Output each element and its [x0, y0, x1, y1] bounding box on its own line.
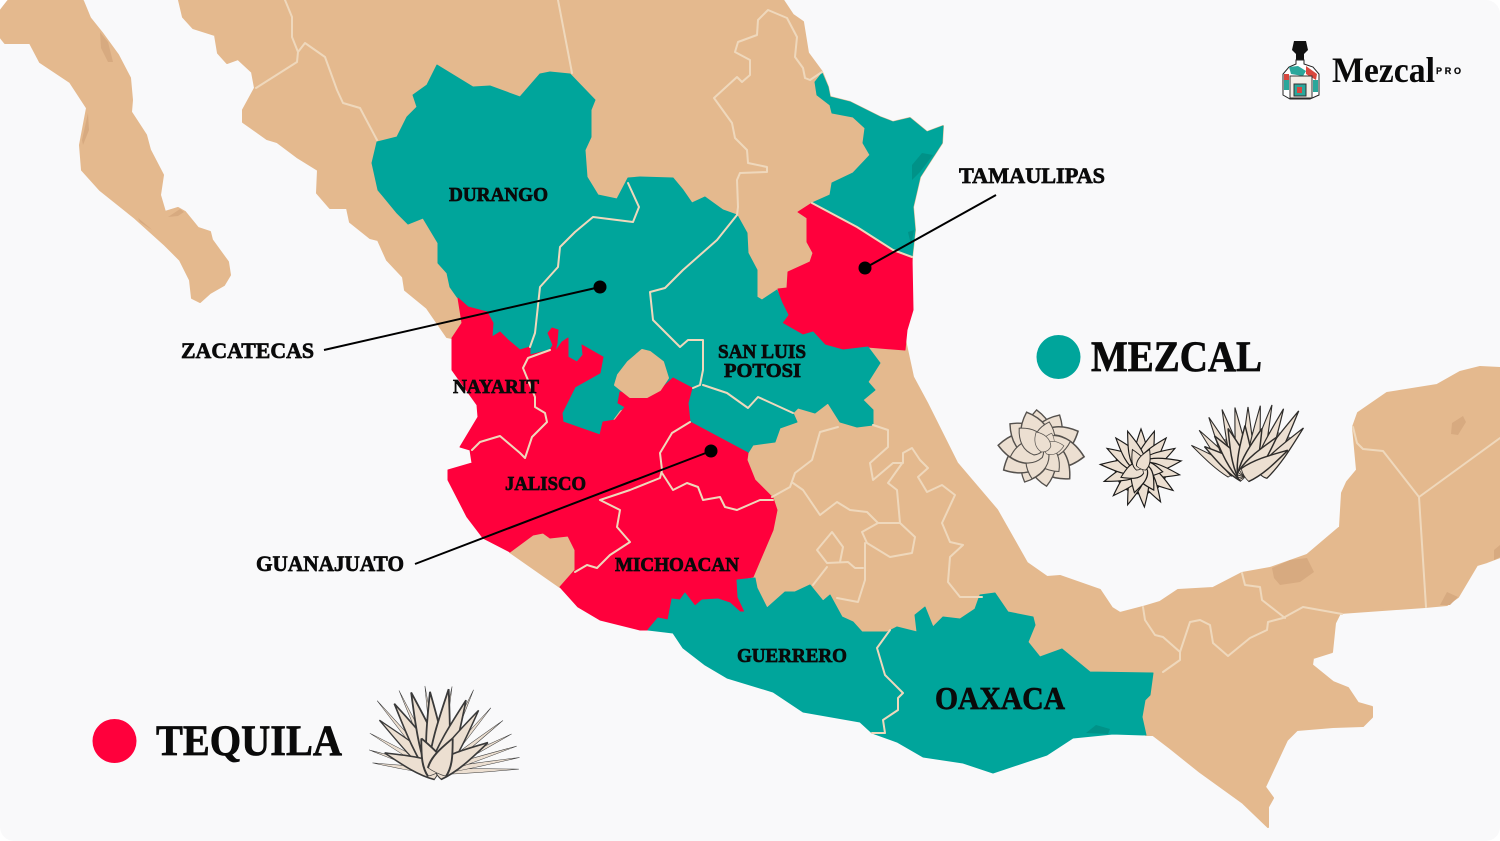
- legend: Mezcal: MEZCAL: [1091, 334, 1262, 381]
- land: enclave near Aguascalientes: [615, 350, 668, 397]
- icon: bottle: [1283, 41, 1319, 99]
- icon: agave rosette round leaves: [996, 407, 1087, 489]
- region: Mezcal central states: [372, 65, 880, 453]
- region: Mezcal Tamaulipas north: [812, 73, 943, 257]
- logo wordmark: Mezcal: [1332, 50, 1435, 90]
- label: San Luis Potosi: SAN LUIS: [718, 341, 806, 363]
- label: Oaxaca: OAXACA: [935, 680, 1065, 716]
- label: Guerrero: GUERRERO: [737, 645, 847, 667]
- terrain shading: [82, 32, 1500, 734]
- label: Jalisco: JALISCO: [505, 473, 586, 495]
- icon: blue agave plant: [368, 686, 520, 780]
- label: San Luis Potosi: POTOSI: [724, 360, 801, 382]
- leader line: Tamaulipas: [858, 195, 996, 274]
- region: Tequila western states: [448, 298, 777, 630]
- region: Mezcal Guerrero and Oaxaca: [648, 578, 1153, 773]
- label: Tamaulipas: TAMAULIPAS: [959, 163, 1105, 188]
- label: San Luis Potosi: [718, 341, 806, 382]
- label: Michoacan: MICHOACAN: [615, 554, 740, 576]
- state borders: [256, 0, 1500, 733]
- logo: Mezcal Pro: [1283, 41, 1461, 99]
- label: Nayarit: NAYARIT: [453, 376, 540, 398]
- legend: Tequila: TEQUILA: [156, 718, 342, 765]
- land: Baja California: [1, 1, 230, 302]
- label: Zacatecas: ZACATECAS: [181, 338, 314, 363]
- icon: agave plant spiky fan: [1188, 403, 1309, 482]
- icon: agave rosette pointed leaves: [1100, 429, 1182, 508]
- logo suffix: PRO: [1436, 66, 1461, 76]
- leader line: Guanajuato: [415, 444, 718, 564]
- region: Tequila Tamaulipas south: [778, 203, 913, 350]
- leader line: Zacatecas: [324, 280, 606, 350]
- label: Durango: DURANGO: [449, 184, 548, 206]
- label: Guanajuato: GUANAJUATO: [256, 551, 404, 576]
